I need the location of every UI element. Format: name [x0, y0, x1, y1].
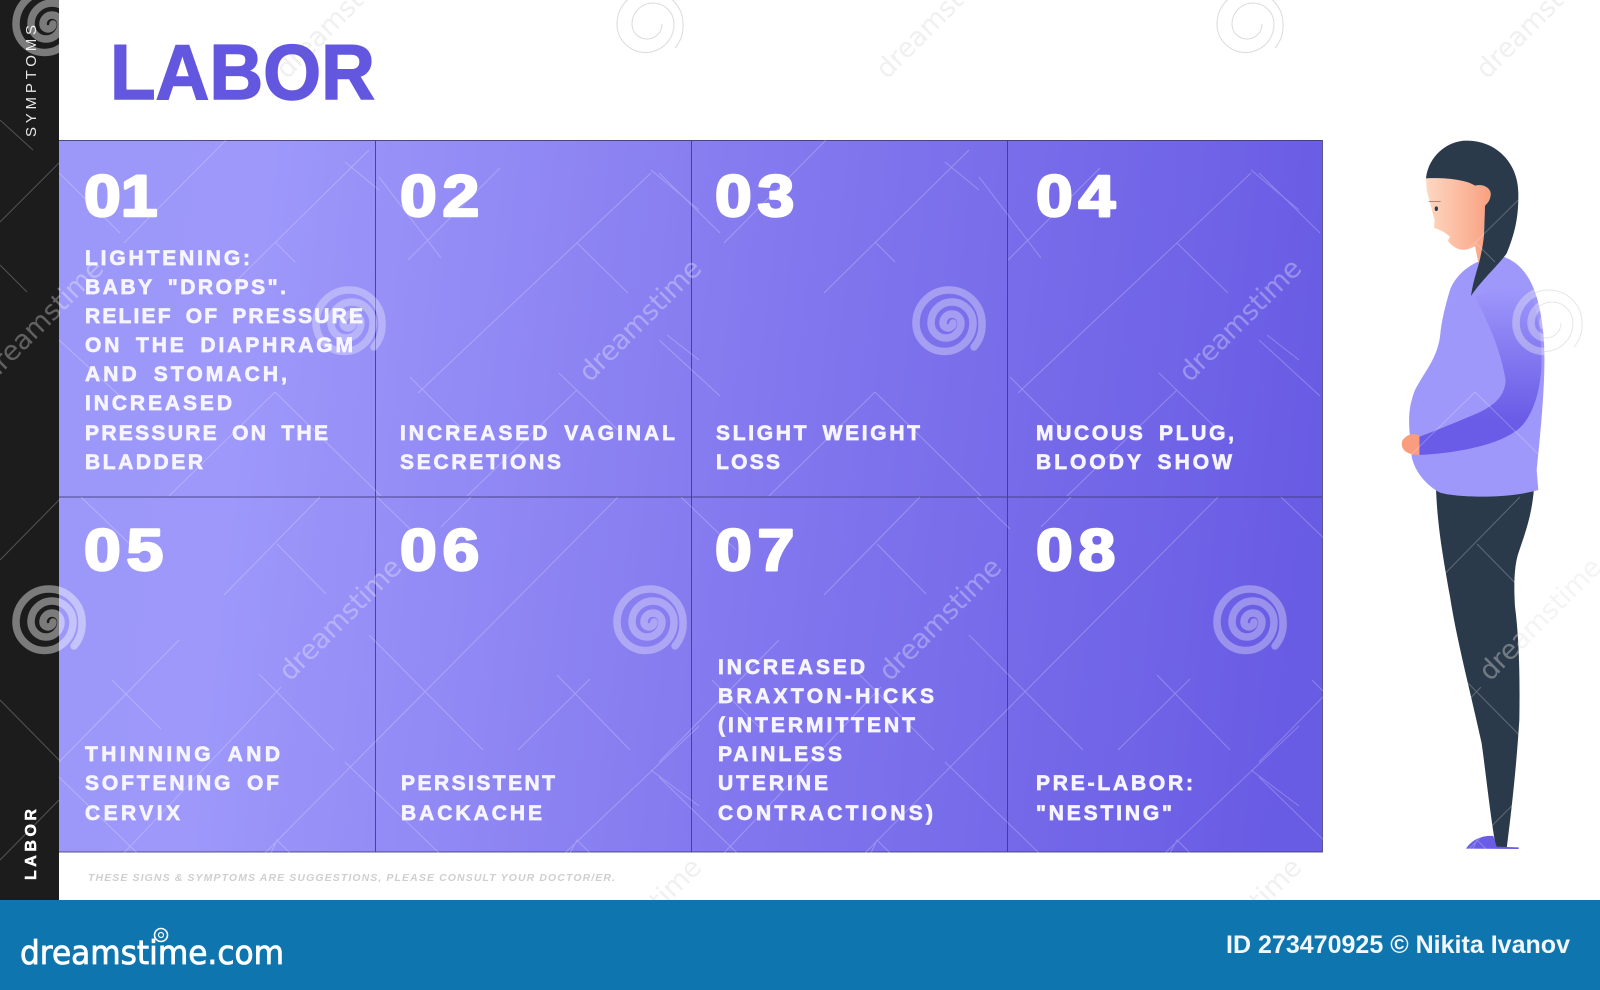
text: vaginal secretions: SECRETIONS	[400, 451, 561, 474]
text: cervix	[85, 743, 280, 825]
watermark overlay: dreamstime	[573, 253, 708, 388]
panel: symptom grid	[59, 140, 1322, 852]
footer banner	[0, 900, 1600, 990]
sidebar	[0, 0, 59, 900]
text: cervix: CERVIX	[85, 802, 180, 825]
number 04: 04	[1036, 165, 1121, 229]
watermark overlay: dreamstime	[1173, 253, 1308, 388]
text: braxton-hicks: PAINLESS	[718, 743, 842, 766]
panel 03	[715, 165, 920, 474]
dreamstime logo: dreamstime.com	[20, 933, 284, 972]
text: vaginal secretions	[400, 422, 675, 474]
sweater	[1409, 257, 1544, 497]
watermark overlay: dreamstime	[873, 552, 1008, 687]
text: nesting	[1036, 772, 1193, 825]
text: weight loss: LOSS	[716, 451, 780, 474]
text: backache: BACKACHE	[401, 802, 542, 825]
panel 02	[400, 165, 675, 474]
text: braxton-hicks: UTERINE	[718, 772, 828, 795]
text: mucous plug	[1036, 422, 1234, 474]
text: cervix: THINNING AND	[85, 743, 280, 766]
text: nesting: "NESTING"	[1036, 802, 1172, 825]
hand	[1402, 434, 1419, 455]
text: lightening: BLADDER	[85, 451, 203, 474]
text: mucous plug: MUCOUS PLUG,	[1036, 422, 1234, 445]
hair	[1426, 141, 1518, 296]
number 05: 05	[84, 519, 169, 583]
image id and credit: ID 273470925 © Nikita Ivanov	[1226, 931, 1570, 959]
text: braxton-hicks: INCREASED	[718, 656, 865, 679]
text: vaginal secretions: INCREASED VAGINAL	[400, 422, 675, 445]
head	[1426, 178, 1491, 263]
panel 05	[84, 519, 280, 825]
panel 07	[715, 519, 934, 825]
panel 04	[1036, 165, 1234, 474]
illustration: pregnant woman	[1402, 141, 1544, 849]
number 08: 08	[1036, 519, 1121, 583]
text: braxton-hicks: (INTERMITTENT	[718, 714, 915, 737]
number 06: 06	[400, 519, 485, 583]
text: lightening: LIGHTENING:	[85, 247, 250, 270]
text: backache: PERSISTENT	[401, 772, 555, 795]
text: weight loss	[716, 422, 920, 474]
text: backache	[401, 772, 555, 825]
text: lightening: INCREASED	[85, 392, 232, 415]
panel 01	[84, 165, 363, 474]
footnote: THESE SIGNS & SYMPTOMS ARE SUGGESTIONS, PLEASE CONSULT YOUR DOCTOR/ER.	[88, 872, 615, 884]
text: cervix: SOFTENING OF	[85, 772, 279, 795]
text: lightening: PRESSURE ON THE	[85, 422, 328, 445]
number 01: 01	[84, 165, 163, 229]
text: braxton-hicks	[718, 656, 934, 825]
sidebar label: symptoms: SYMPTOMS	[23, 25, 40, 137]
text: mucous plug: BLOODY SHOW	[1036, 451, 1232, 474]
title: LABOR	[110, 28, 375, 116]
text: weight loss: SLIGHT WEIGHT	[716, 422, 920, 445]
watermark overlay: dreamstime	[1173, 852, 1308, 987]
legs	[1436, 488, 1534, 848]
sidebar label: labor: LABOR	[23, 809, 40, 880]
text: lightening	[85, 247, 363, 474]
number 03: 03	[715, 165, 800, 229]
text: braxton-hicks: CONTRACTIONS)	[718, 802, 933, 825]
watermark overlay: dreamstime	[273, 552, 408, 687]
number 07: 07	[715, 519, 800, 583]
number 02: 02	[400, 165, 485, 229]
eye	[1429, 201, 1441, 211]
text: lightening: BABY "DROPS".	[85, 276, 286, 299]
sleeve	[1419, 286, 1542, 455]
text: lightening: RELIEF OF PRESSURE	[85, 305, 363, 328]
text: lightening: AND STOMACH,	[85, 363, 287, 386]
panel 06	[400, 519, 555, 825]
watermark overlay: dreamstime	[573, 852, 708, 987]
panel 08	[1036, 519, 1193, 825]
shoe	[1466, 836, 1519, 849]
text: lightening: ON THE DIAPHRAGM	[85, 334, 353, 357]
text: braxton-hicks: BRAXTON-HICKS	[718, 685, 934, 708]
text: nesting: PRE-LABOR:	[1036, 772, 1193, 795]
